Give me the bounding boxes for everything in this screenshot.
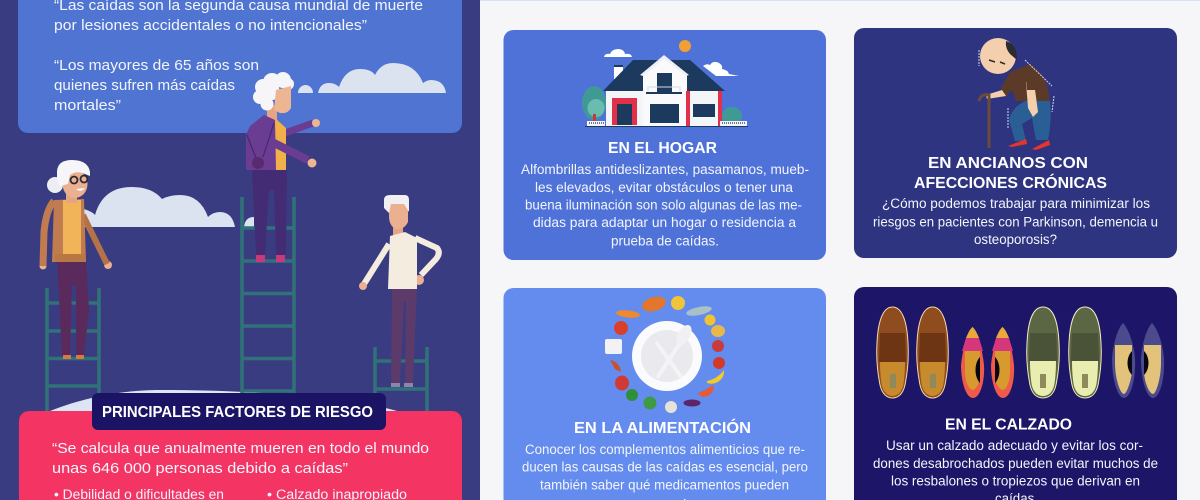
panel: risk factors (19, 411, 462, 500)
heading: risk factors: PRINCIPALES FACTORES DE RIESGO (102, 404, 373, 421)
panel: nutrition (504, 288, 826, 500)
text: nutrition: Conocer los complementos alimenticios que re- (525, 442, 805, 457)
panel: risk factors: unas 646 000 personas debido a caídas” (52, 461, 348, 477)
panel: statistics callout: mortales” (54, 98, 121, 114)
text: home: prueba de caídas. (611, 234, 719, 248)
icon: navy flats (1112, 323, 1164, 398)
panel: risk factors: “Se calcula que anualmente mueren en todo el mundo (52, 441, 429, 457)
text: nutrition (522, 442, 808, 500)
text: chronic conditions: riesgos en pacientes con Parkinson, demencia u (873, 214, 1158, 230)
panel: chronic conditions (854, 28, 1177, 258)
text: home: didas para adaptar un hogar o residencia a (533, 215, 796, 230)
panel: statistics callout (18, 0, 462, 133)
heading: chronic conditions: EN ANCIANOS CON (928, 155, 1088, 172)
text: home: Alfombrillas antideslizantes, pasamanos, mueb- (521, 162, 809, 177)
heading: nutrition: EN LA ALIMENTACIÓN (574, 418, 751, 437)
text: footwear: los resbalones o tropiezos que derivan en (891, 474, 1140, 488)
heading: chronic conditions: AFECCIONES CRÓNICAS (914, 173, 1107, 192)
heading: footwear: EN EL CALZADO (945, 416, 1072, 434)
heading: chronic conditions (914, 155, 1107, 192)
heading: home: EN EL HOGAR (608, 140, 717, 157)
ladder: right (375, 347, 427, 411)
text: home: buena iluminación son solo algunas de las me- (525, 198, 802, 212)
person: man with white shirt (359, 195, 439, 387)
text: footwear: dones desabrochados pueden evitar muchos de (873, 456, 1158, 471)
panel: statistics callout: quienes sufren más caídas (54, 78, 235, 94)
ladder: center (242, 197, 294, 393)
person: woman with glasses (40, 160, 112, 359)
cloud: upper right (298, 63, 446, 93)
icon: green shoes (1027, 307, 1101, 398)
panel: statistics callout: “Los mayores de 65 años son (54, 58, 259, 74)
person: woman with purple jacket (246, 72, 320, 262)
text: nutrition: ducen las causas de las caídas es esencial, pero (522, 460, 808, 474)
ladder: left (47, 288, 99, 411)
icon: elderly man with cane (979, 38, 1054, 150)
ground ellipse (50, 390, 397, 411)
panel: footwear (854, 287, 1177, 500)
panel: statistics callout: por lesiones accidentales o no intencionales” (54, 18, 367, 34)
text: chronic conditions: osteoporosis? (974, 232, 1057, 247)
text: nutrition: también saber qué medicamentos pueden (540, 478, 789, 492)
panel: home (504, 30, 826, 260)
icon: pink flats (961, 327, 1014, 398)
heading: risk factors (92, 393, 386, 430)
text: home: les elevados, evitar obstáculos o tener una (535, 180, 793, 195)
text: chronic conditions (873, 196, 1158, 247)
text: chronic conditions: ¿Cómo podemos trabajar para minimizar los (882, 196, 1150, 211)
text: footwear (873, 438, 1158, 500)
cloud: lower left (84, 187, 254, 227)
icon: brown shoes (877, 307, 948, 398)
icon: house (582, 40, 748, 127)
icon: plate with food ring (605, 294, 725, 413)
text: home (521, 162, 809, 248)
text: footwear: Usar un calzado adecuado y evitar los cor- (886, 438, 1143, 453)
